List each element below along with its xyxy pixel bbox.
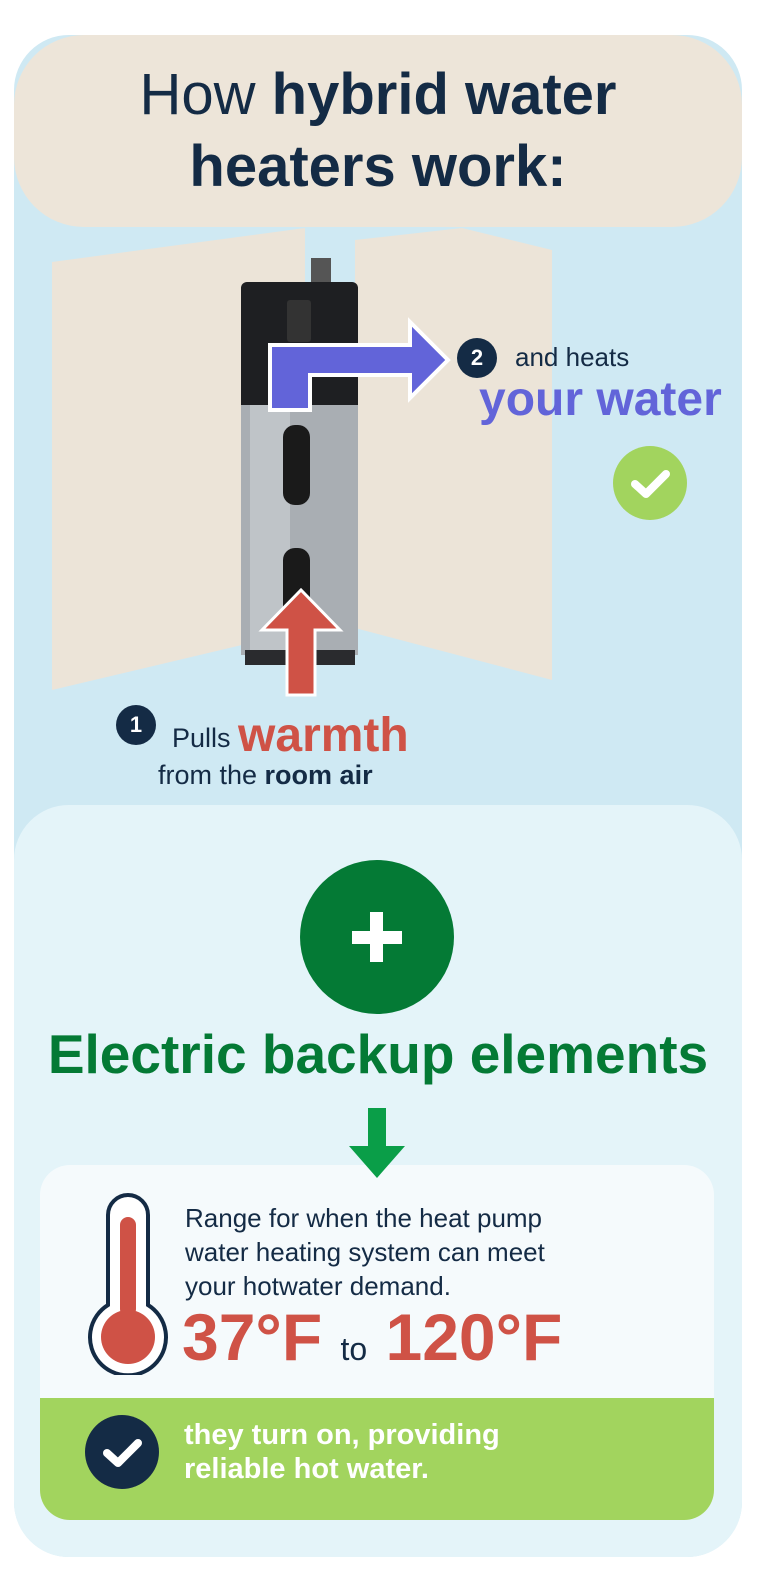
- info box: [40, 1165, 714, 1520]
- wall illustration: [52, 228, 552, 696]
- text: turn on: reliable hot water.: [184, 1453, 429, 1485]
- step 1: 1: [130, 712, 142, 737]
- title: [139, 62, 616, 199]
- step 1: Pulls warmth: [172, 709, 409, 762]
- heater: [241, 258, 358, 665]
- arrow: red: [262, 590, 340, 695]
- step 2: 2: [471, 345, 483, 370]
- lower panel: [14, 805, 742, 1557]
- icon: green check: [613, 446, 687, 520]
- step 2: [457, 338, 722, 426]
- arrow: green down: [349, 1108, 405, 1178]
- text: range: water heating system can meet: [185, 1237, 545, 1267]
- icon: thermometer: [88, 1193, 168, 1375]
- title bubble: [14, 35, 742, 227]
- green strip: [40, 1398, 714, 1520]
- text: range: your hotwater demand.: [185, 1271, 451, 1301]
- text: range: [185, 1203, 545, 1301]
- heading: electric backup: Electric backup elements: [48, 1023, 708, 1085]
- step 2: your water: [479, 373, 722, 426]
- icon: navy check: [85, 1415, 159, 1489]
- text: range: Range for when the heat pump: [185, 1203, 542, 1233]
- text: turn on: [184, 1419, 500, 1485]
- text: turn on: they turn on, providing: [184, 1419, 500, 1451]
- text: temperatures: 37°F to 120°F: [182, 1300, 562, 1374]
- arrow: blue: [270, 322, 448, 410]
- step 1: [116, 705, 409, 790]
- icon: plus circle: [300, 860, 454, 1014]
- step 2: and heats: [515, 342, 629, 372]
- title: How hybrid water: [139, 62, 616, 127]
- title: heaters work:: [189, 134, 567, 199]
- step 1: from the room air: [158, 760, 373, 790]
